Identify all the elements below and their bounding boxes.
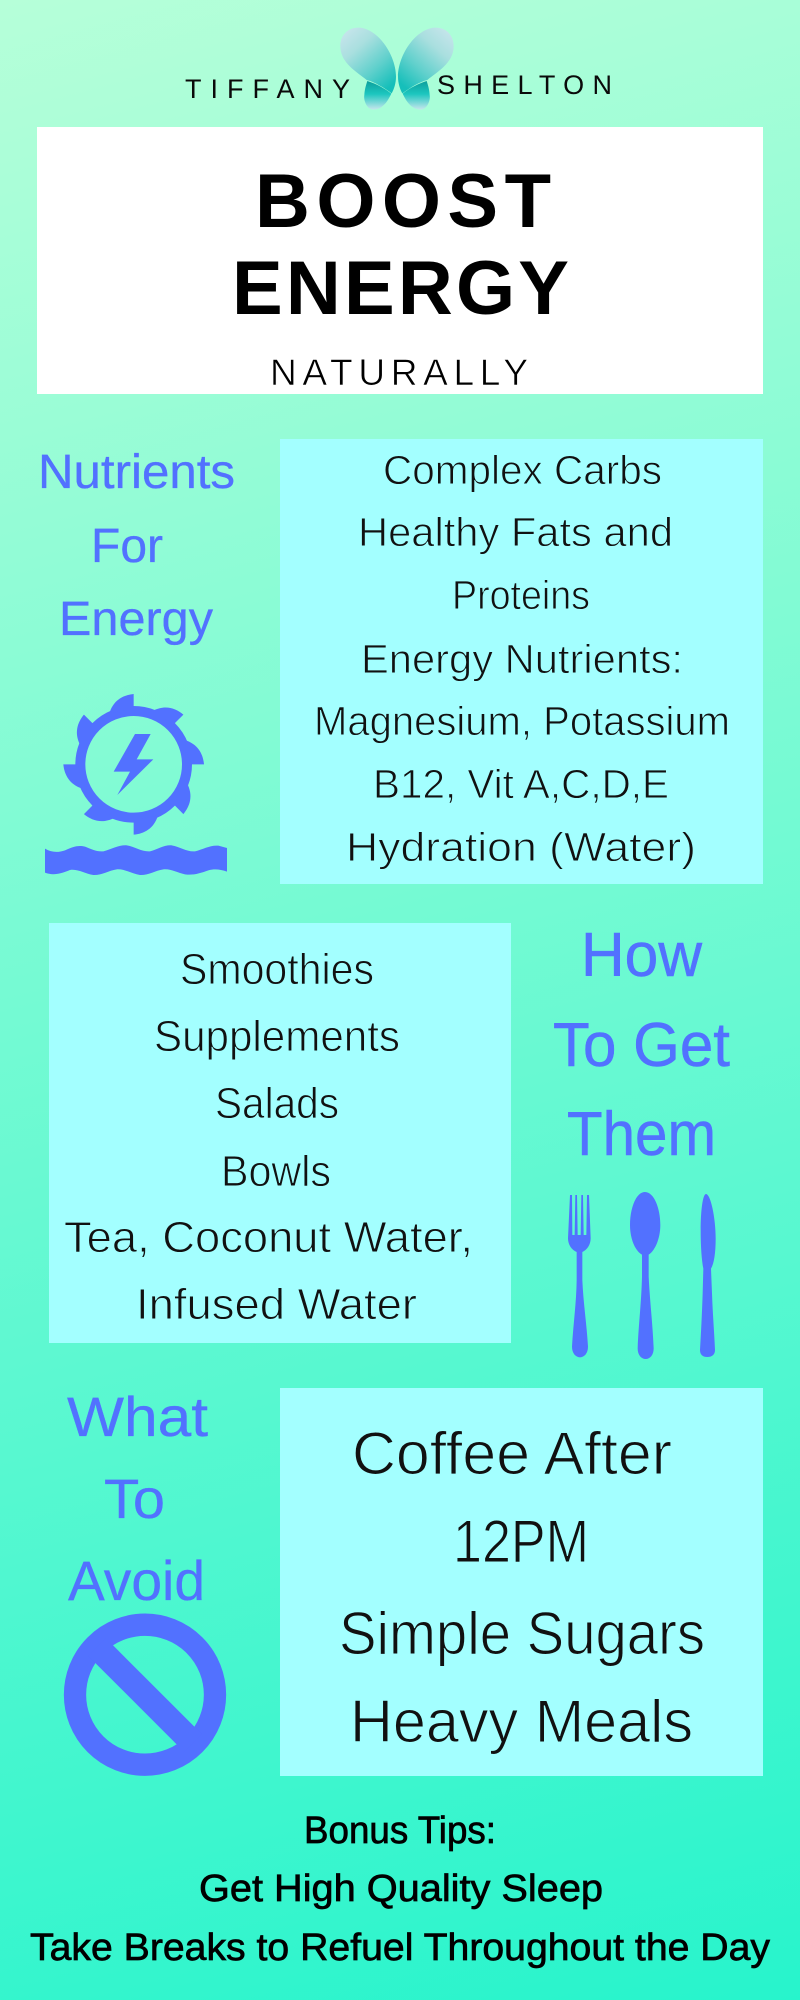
icon: prohibited sign	[75, 1625, 215, 1765]
panel: how to get them list: Bowls	[221, 1147, 331, 1196]
panel: nutrients list: Hydration (Water)	[346, 824, 696, 870]
panel: nutrients list: Magnesium, Potassium	[314, 698, 730, 744]
panel: nutrients list: B12, Vit A,C,D,E	[373, 761, 669, 807]
panel: nutrients list	[280, 439, 763, 884]
heading: What To Avoid	[67, 1385, 208, 1612]
logo text: SHELTON	[437, 70, 612, 100]
heading: How To Get Them	[553, 921, 730, 1169]
logo text: TIFFANY	[185, 74, 350, 104]
title: Boost Energy	[232, 159, 569, 331]
heading: Nutrients For Energy: Nutrients	[38, 446, 235, 499]
bonus tips	[30, 1810, 770, 1969]
panel: nutrients list: Healthy Fats and	[358, 509, 673, 555]
panel: what to avoid list: Heavy Meals	[350, 1688, 693, 1755]
bonus tips: Take Breaks to Refuel Throughout the Day	[30, 1927, 770, 1969]
icon: fork	[568, 1195, 591, 1357]
icon: spoon	[630, 1192, 660, 1359]
panel: how to get them list: Salads	[215, 1079, 339, 1128]
panel: how to get them list: Supplements	[154, 1012, 400, 1061]
bonus tips: Get High Quality Sleep	[199, 1868, 603, 1910]
heading: How To Get Them: How	[581, 921, 702, 990]
panel: nutrients list: Proteins	[452, 572, 590, 618]
heading: Nutrients For Energy: Energy	[59, 593, 213, 646]
panel: how to get them list	[49, 923, 511, 1343]
title: Boost Energy: ENERGY	[232, 246, 569, 331]
subtitle: Naturally: NATURALLY	[270, 352, 528, 393]
panel: how to get them list: Tea, Coconut Water,	[64, 1213, 473, 1262]
logo text	[185, 70, 612, 104]
heading: Nutrients For Energy: For	[91, 520, 163, 573]
icon: knife	[700, 1194, 716, 1357]
icon: fork, spoon and knife	[568, 1192, 716, 1359]
icon: butterfly	[340, 28, 454, 110]
heading: Nutrients For Energy	[38, 446, 235, 646]
heading: How To Get Them: Them	[567, 1100, 716, 1169]
bonus tips: Bonus Tips:	[304, 1810, 496, 1852]
panel: nutrients list: Energy Nutrients:	[361, 636, 683, 682]
heading: How To Get Them: To Get	[553, 1011, 730, 1080]
logo: Tiffany Shelton	[185, 28, 612, 110]
panel: how to get them list: Infused Water	[136, 1280, 417, 1329]
icon: water wheel with lightning bolt	[45, 694, 227, 875]
heading: What To Avoid: To	[104, 1467, 165, 1530]
panel: what to avoid list: Coffee After	[352, 1420, 672, 1487]
panel: how to get them list: Smoothies	[180, 945, 374, 994]
title panel	[37, 127, 763, 394]
heading: What To Avoid: What	[67, 1385, 208, 1448]
panel: what to avoid list: 12PM	[453, 1508, 589, 1575]
title: Boost Energy: BOOST	[255, 159, 551, 244]
panel: what to avoid list: Simple Sugars	[339, 1600, 705, 1667]
panel: nutrients list: Complex Carbs	[383, 447, 662, 493]
panel: what to avoid list	[280, 1388, 763, 1776]
heading: What To Avoid: Avoid	[68, 1549, 205, 1612]
